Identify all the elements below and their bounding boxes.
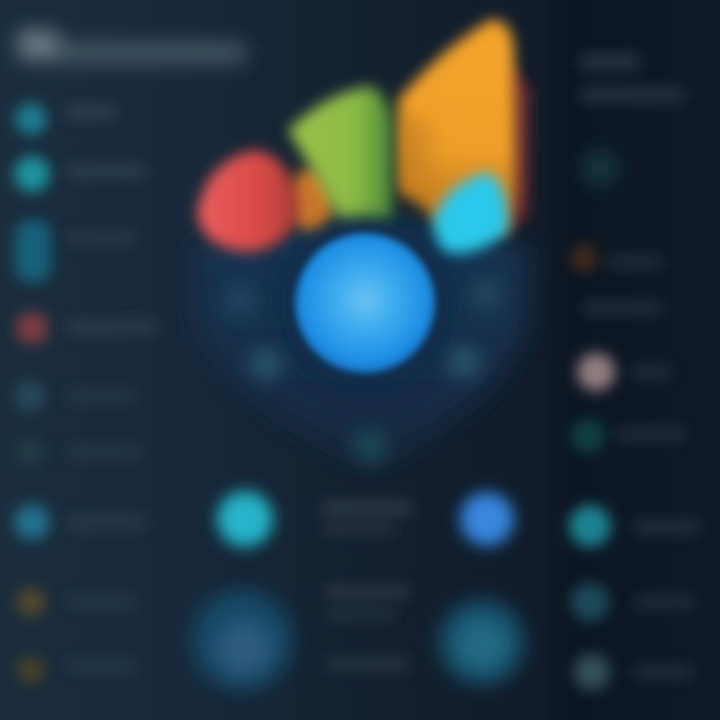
icon: slate dot — [15, 381, 45, 411]
icon: brown dot — [571, 245, 597, 271]
text block: centre labels — [322, 502, 412, 670]
chart: red segment — [197, 150, 300, 252]
icon: amber dot — [17, 588, 45, 616]
icon: dim dot — [17, 439, 43, 465]
chart: glow ring — [281, 219, 449, 387]
icon: grey teal dot — [574, 654, 610, 690]
text block: right labels — [582, 256, 700, 678]
title — [18, 30, 246, 64]
icon: teal dot 1 — [15, 103, 47, 135]
chart: central blue circle — [295, 233, 435, 373]
icon: amber dot 2 — [18, 657, 44, 683]
icon: large teal circle — [192, 590, 292, 690]
chart: orange joint — [288, 168, 336, 232]
chart: green segment — [288, 86, 392, 222]
left list — [14, 103, 156, 683]
text block: right heading — [580, 54, 685, 102]
chart: cyan segment — [432, 172, 508, 253]
chart: central shield — [194, 20, 530, 465]
text block: left labels — [66, 105, 156, 672]
icon: blue circle — [455, 487, 519, 551]
chart: shield marks — [224, 280, 500, 462]
icon: dim teal — [582, 150, 618, 186]
chart: yellow segment shade — [400, 110, 445, 215]
icon: pale dot — [577, 353, 615, 391]
panel: right sidebar — [569, 54, 700, 690]
icon: large blue-teal circle — [440, 600, 524, 684]
icon: red dot — [16, 312, 48, 344]
icon: blue dot — [14, 504, 50, 540]
chart: dark red edge — [506, 60, 530, 232]
icon: bright teal dot — [569, 505, 611, 547]
icon: dark teal dot — [571, 419, 605, 453]
panel: bottom centre row — [192, 485, 524, 690]
icon: teal dot 2 — [14, 156, 50, 192]
icon: muted teal dot — [571, 583, 609, 621]
icon: teal block — [15, 220, 51, 282]
icon: cyan circle — [211, 485, 279, 553]
chart: yellow segment — [398, 20, 516, 232]
